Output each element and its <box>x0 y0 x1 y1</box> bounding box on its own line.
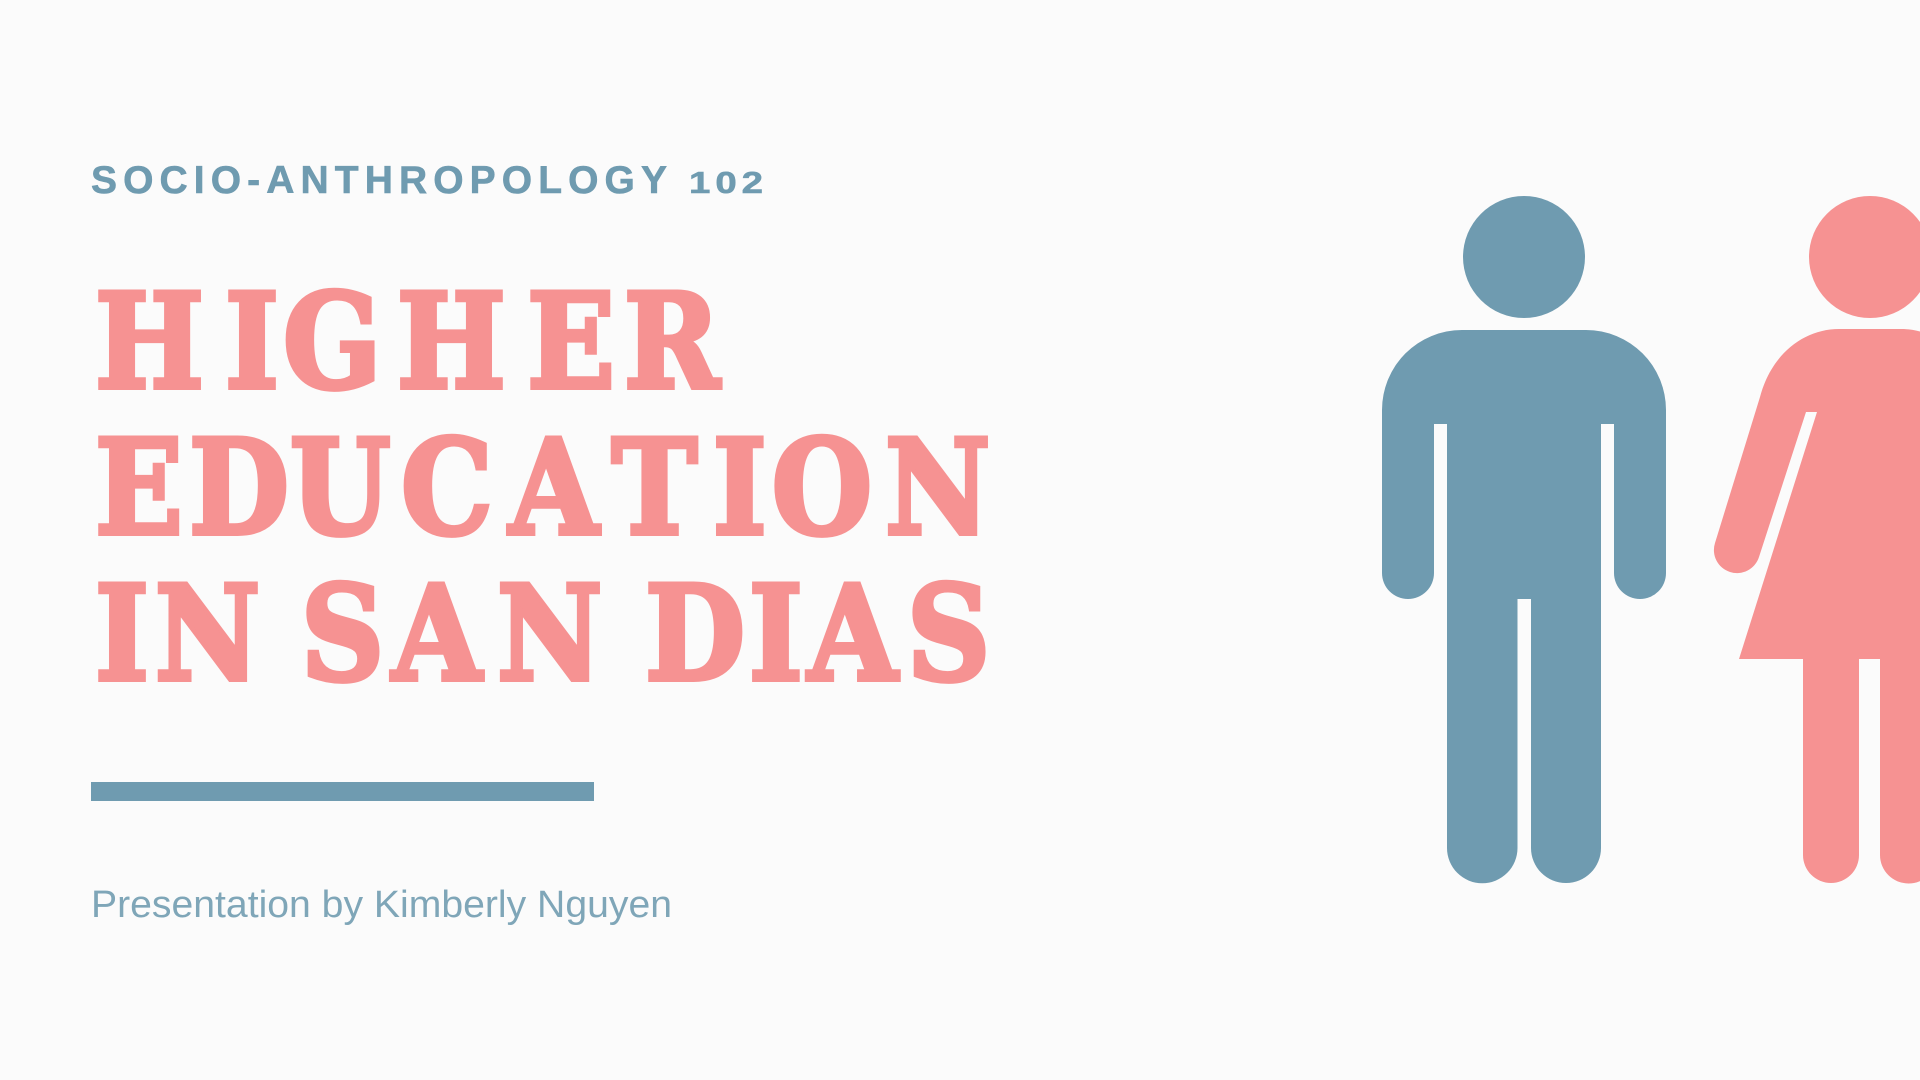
presenter credit: Presentation by Kimberly Nguyen <box>91 884 672 926</box>
woman body <box>1714 329 1920 884</box>
eyebrow number: 102 <box>689 165 768 200</box>
title line 1: HIGHER <box>95 265 721 419</box>
eyebrow words: SOCIO-ANTHROPOLOGY <box>91 159 667 202</box>
man body <box>1382 330 1666 883</box>
accent bar <box>91 782 594 801</box>
title <box>95 265 990 711</box>
man head <box>1463 196 1585 318</box>
icon: man figure <box>1382 196 1666 883</box>
woman head <box>1809 196 1920 318</box>
title line 3: IN SAN DIAS <box>95 557 990 711</box>
icon: woman figure <box>1714 196 1920 884</box>
eyebrow: course name <box>91 159 768 202</box>
title line 2: EDUCATION <box>95 411 990 565</box>
